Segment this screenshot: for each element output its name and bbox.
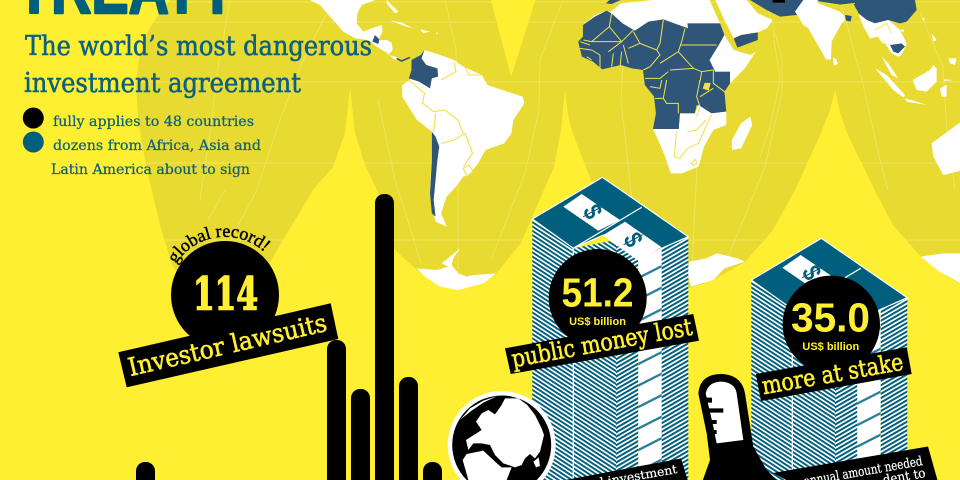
Antarctica: Australia lobe	[921, 253, 960, 283]
callout: 114 investor lawsuits	[118, 226, 338, 388]
dollar signs: $	[576, 200, 608, 224]
Cambodia	[890, 43, 905, 53]
caption: investment	[560, 458, 688, 480]
Africa internal borders	[580, 13, 727, 117]
Arabia	[715, 0, 773, 38]
land: zoomed-map coordinate group	[402, 0, 960, 287]
money stack: 51.2: $	[617, 228, 649, 252]
Australia	[932, 120, 960, 175]
unit: US$ billion	[802, 341, 859, 353]
icon: thermometer	[698, 374, 780, 480]
money stack: 51.2	[532, 177, 688, 480]
outline	[698, 374, 780, 480]
Madagascar	[732, 117, 752, 150]
Antarctica: Africa lobe	[687, 253, 745, 287]
white band side	[857, 309, 881, 480]
subtitle: The world’s most dangerous	[25, 31, 372, 62]
South-East Asia borders	[818, 2, 892, 43]
Horn of Africa	[710, 35, 756, 83]
land: Central America and Caribbean	[310, 0, 438, 61]
circle	[171, 241, 279, 349]
icon: globe	[448, 391, 556, 480]
South America	[402, 50, 524, 227]
South America borders	[409, 62, 482, 176]
land: Antarctic peninsula	[417, 248, 496, 290]
number: 51.2	[562, 270, 634, 316]
map projection lobes	[136, 0, 960, 305]
callout: 35.0 more at stake: more at stake	[760, 348, 905, 400]
India	[795, 0, 845, 65]
ticks	[705, 398, 723, 434]
islands	[875, 17, 957, 105]
right side	[881, 298, 907, 480]
Pakistan and neighbours	[750, 0, 805, 17]
bar chart: lawsuits per year	[136, 194, 442, 480]
right side	[662, 237, 688, 480]
world map	[136, 0, 960, 290]
land: South and South-East Asia	[750, 0, 960, 175]
legend text: dozens from Africa, Asia and	[53, 138, 261, 154]
unit: US$ billion	[569, 316, 626, 328]
Bangladesh	[845, 15, 852, 22]
Africa borders	[674, 115, 711, 165]
banner	[505, 314, 699, 374]
small black box	[773, 0, 785, 3]
top face	[532, 177, 688, 260]
left side	[532, 219, 573, 480]
banner	[756, 347, 912, 401]
left side	[751, 280, 792, 480]
middle side	[792, 301, 835, 480]
banner	[118, 303, 338, 387]
callout: 35.0 more at stake	[756, 276, 912, 401]
circle	[783, 276, 880, 373]
subtitle	[24, 31, 372, 99]
legend dot: black	[23, 108, 44, 128]
callout: 51.2 public money lost	[505, 249, 699, 374]
North Africa	[583, 0, 720, 31]
China	[818, 0, 917, 23]
top face	[751, 238, 907, 321]
Chile	[430, 132, 439, 217]
legend text: fully applies to 48 countries	[53, 114, 254, 130]
middle side	[573, 240, 616, 480]
legend dot: teal	[23, 132, 44, 152]
Southern Africa	[653, 105, 726, 173]
continents	[461, 396, 544, 480]
subtitle: investment agreement	[24, 68, 301, 99]
legend text: Latin America about to sign	[51, 162, 250, 178]
caption: annual amount needed	[773, 446, 938, 480]
dollar sign: $	[795, 261, 827, 285]
legend	[23, 108, 261, 178]
callout: 114 investor lawsuits: global record!	[170, 226, 271, 265]
bill band	[782, 255, 839, 292]
number: 114	[193, 268, 258, 320]
white band side	[638, 248, 662, 480]
bill bands	[563, 194, 620, 231]
South-East Asia mainland	[858, 13, 907, 57]
callout: 51.2 public money lost: public money lost	[509, 313, 695, 373]
Yemen	[734, 32, 758, 48]
Colombia	[409, 50, 438, 88]
circle	[549, 249, 647, 347]
number: 35.0	[791, 294, 870, 340]
money stack: 35.0	[751, 238, 907, 480]
callout: 114 investor lawsuits: Investor lawsuits	[125, 308, 330, 382]
legend text	[51, 114, 261, 178]
arc label	[176, 237, 270, 264]
glass	[706, 382, 743, 443]
Sanctioned Africa	[578, 11, 730, 129]
